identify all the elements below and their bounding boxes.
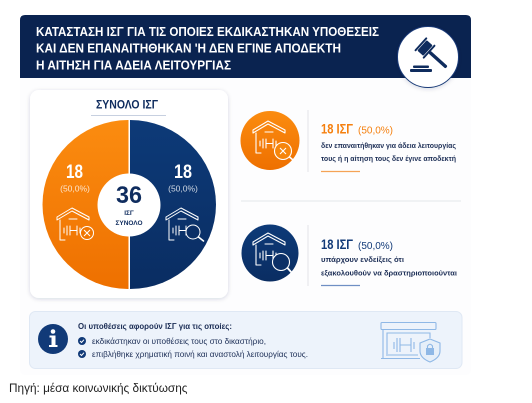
orange slice label xyxy=(60,161,90,194)
title: Η ΑΙΤΗΣΗ ΓΙΑ ΑΔΕΙΑ ΛΕΙΤΟΥΡΓΙΑΣ xyxy=(36,58,231,72)
header banner xyxy=(20,15,471,78)
center total: ΣΥΝΟΛΟ xyxy=(115,220,143,227)
text block: not resubmitted: τους ή η αίτηση τους δεν έγινε αποδεκτή xyxy=(321,156,456,163)
text block: not resubmitted xyxy=(321,122,456,172)
text block: not resubmitted: δεν επαναιτήθηκαν για άδεια λειτουργίας xyxy=(321,142,456,150)
panel: total card xyxy=(30,90,228,298)
panel: infographic background xyxy=(20,15,471,375)
orange slice label: (50,0%) xyxy=(60,184,90,194)
blue slice label: 18 xyxy=(174,161,192,183)
center total: ΙΣΓ xyxy=(124,210,134,217)
center total xyxy=(98,174,160,236)
orange slice label: 18 xyxy=(66,161,83,183)
source note: Πηγή: μέσα κοινωνικής δικτύωσης xyxy=(9,381,188,395)
icon: gym closed in pie xyxy=(57,208,94,240)
pie chart xyxy=(42,120,216,289)
icon: gym search in pie xyxy=(166,208,204,241)
icon: blue gym search xyxy=(242,224,298,282)
text block: not resubmitted: (50,0%) xyxy=(358,126,393,136)
blue slice label: (50,0%) xyxy=(168,184,198,194)
panel: info note xyxy=(30,312,462,368)
bullet two: επιβλήθηκε χρηματική ποινή και αναστολή λειτουργίας τους. xyxy=(92,350,308,359)
blue slice label xyxy=(168,161,198,194)
text block: still operating: 18 ΙΣΓ xyxy=(321,237,353,252)
title: ΚΑΤΑΣΤΑΣΗ ΙΣΓ ΓΙΑ ΤΙΣ ΟΠΟΙΕΣ ΕΚΔΙΚΑΣΤΗΚΑΝ ΥΠΟΘΕΣΕΙΣ xyxy=(36,25,379,39)
center total: 36 xyxy=(116,182,142,209)
title xyxy=(36,25,379,72)
icon: secured gym window xyxy=(381,322,440,362)
card heading: ΣΥΝΟΛΟ ΙΣΓ xyxy=(96,100,158,112)
icon: info xyxy=(38,324,68,354)
icon: orange gym closed xyxy=(240,111,300,170)
text block: still operating: υπάρχουν ενδείξεις ότι xyxy=(321,255,404,264)
text block: still operating: (50,0%) xyxy=(358,241,393,252)
text block: still operating xyxy=(321,237,457,286)
icon: gavel xyxy=(398,26,458,88)
text block: still operating: εξακολουθούν να δραστηριοποιούνται xyxy=(321,268,457,278)
note heading: Οι υποθέσεις αφορούν ΙΣΓ για τις οποίες: xyxy=(78,322,232,331)
title: ΚΑΙ ΔΕΝ ΕΠΑΝΑΙΤΗΘΗΚΑΝ 'Η ΔΕΝ ΕΓΙΝΕ ΑΠΟΔΕΚΤΗ xyxy=(36,42,341,56)
text block: not resubmitted: 18 ΙΣΓ xyxy=(321,122,353,136)
bullet one: εκδικάστηκαν οι υποθέσεις τους στο δικαστήριο, xyxy=(92,337,266,346)
